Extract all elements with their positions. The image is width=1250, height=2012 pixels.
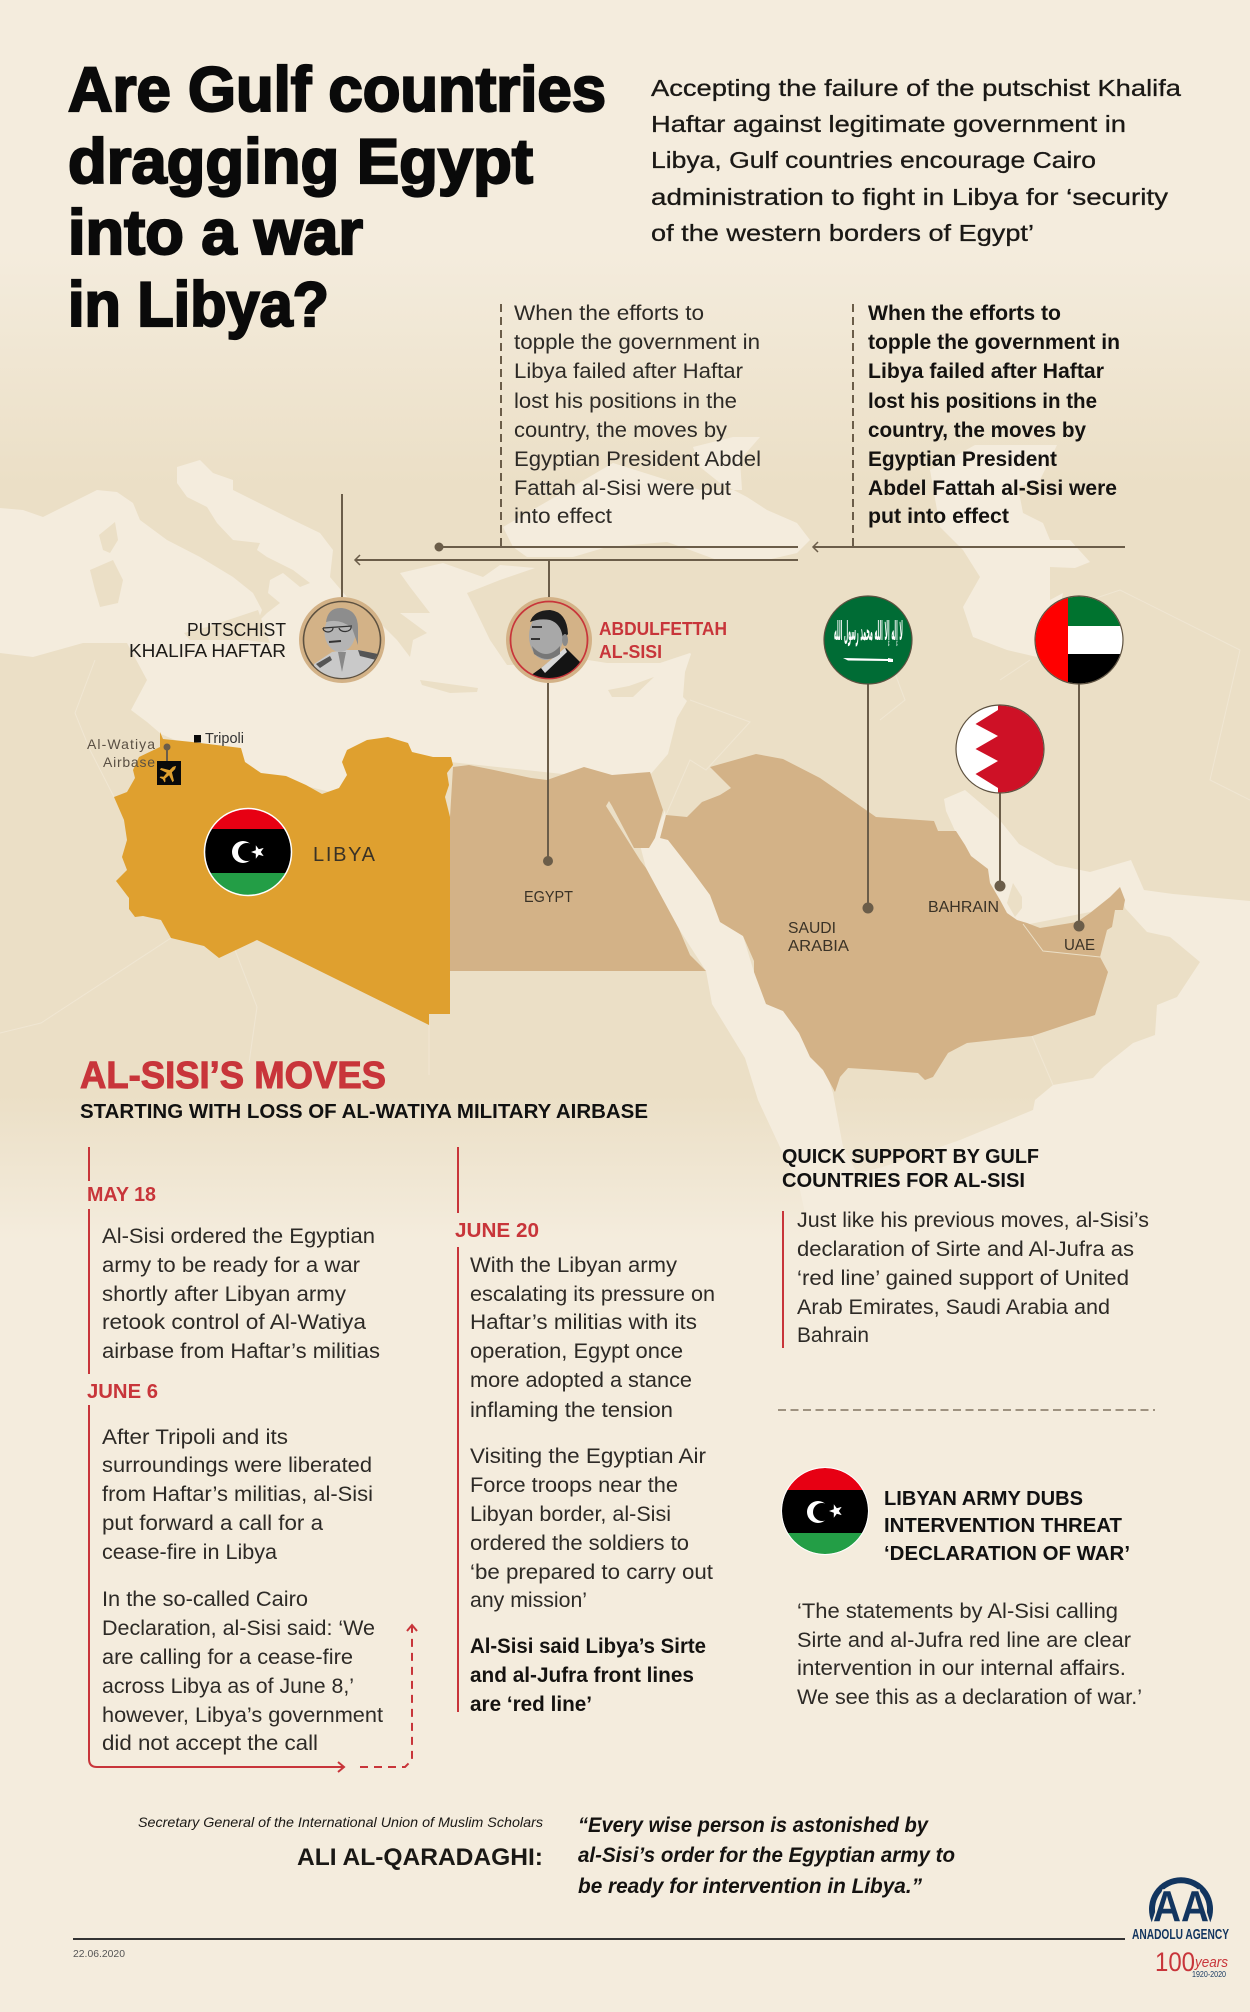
quote attribution: ALI AL-QARADAGHI:: [297, 1844, 543, 1871]
text block: efforts, left column: topple the government in: [514, 331, 760, 354]
text: June 20: [470, 1254, 715, 1612]
label: Abdulfettah al-Sisi: ABDULFETTAH: [599, 618, 727, 639]
text: Libyan army statement: We see this as a declaration of war.’: [797, 1686, 1142, 1709]
heading: Al-Sisi's moves: AL-SISI’S MOVES: [80, 1055, 386, 1097]
text: June 20: Visiting the Egyptian Air: [470, 1445, 706, 1468]
text: quick support: Just like his previous moves, al-Sisi’s: [797, 1209, 1149, 1232]
text: quick support: Arab Emirates, Saudi Arabia and: [797, 1296, 1110, 1319]
map: Saudi Arabia and UAE: [660, 754, 1125, 1092]
label: Al-Watiya Airbase: Al-Watiya: [87, 736, 155, 752]
text: June 20: more adopted a stance: [470, 1369, 692, 1392]
text: Libyan army statement: intervention in our internal affairs.: [797, 1657, 1126, 1680]
quote: be ready for intervention in Libya.”: [578, 1875, 922, 1898]
text: red line statement: [470, 1635, 706, 1716]
text: June 20: Haftar’s militias with its: [470, 1311, 697, 1334]
text block: efforts, bold right column: When the efforts to: [868, 302, 1061, 325]
text: red line statement: are ‘red line’: [470, 1693, 592, 1716]
text block: efforts, bold right column: put into effect: [868, 505, 1009, 528]
portrait: Abdulfettah al-Sisi: [506, 597, 592, 690]
quote: [578, 1814, 955, 1898]
text: June 20: With the Libyan army: [470, 1254, 678, 1277]
text: June 6: from Haftar’s militias, al-Sisi: [102, 1483, 373, 1506]
text: quick support: [783, 1209, 1149, 1348]
text: red line statement: Al-Sisi said Libya’s Sirte: [470, 1635, 706, 1658]
text block: efforts, bold right column: Libya failed after Haftar: [868, 360, 1104, 383]
text block: efforts, bold right column: Egyptian President: [868, 448, 1057, 471]
date: May 18: MAY 18: [87, 1184, 156, 1206]
text: Libyan army statement: [797, 1600, 1142, 1709]
text block: efforts, bold right column: topple the government in: [868, 331, 1120, 354]
label: Abdulfettah al-Sisi: AL-SISI: [599, 641, 662, 662]
text: Libyan army statement: Sirte and al-Jufra red line are clear: [797, 1629, 1131, 1652]
map: Libya: [114, 732, 453, 1025]
text: May 18: shortly after Libyan army: [102, 1283, 347, 1306]
text block: efforts, left column: Egyptian President Abdel: [514, 448, 761, 471]
flag: Libya on map: [204, 808, 292, 896]
background map: [0, 250, 1250, 1330]
logo: 100 years: 100: [1155, 1947, 1195, 1977]
title: in Libya?: [68, 270, 329, 340]
text: June 6: across Libya as of June 8,’: [102, 1675, 354, 1698]
text: June 20: operation, Egypt once: [470, 1340, 683, 1363]
text block: efforts, left column: into effect: [514, 505, 612, 528]
text: May 18: airbase from Haftar’s militias: [102, 1340, 380, 1363]
heading: quick support: COUNTRIES FOR AL-SISI: [782, 1169, 1025, 1192]
text: June 6: [102, 1426, 383, 1755]
logo: Anadolu Agency: AA: [1153, 1882, 1209, 1931]
subheading: STARTING WITH LOSS OF AL-WATIYA MILITARY AIRBASE: [80, 1100, 648, 1123]
intro text: [651, 75, 1181, 246]
connector lines: [342, 304, 1125, 600]
text: June 6: did not accept the call: [102, 1732, 318, 1755]
text: June 6: Declaration, al-Sisi said: ‘We: [102, 1617, 375, 1640]
text: quick support: Bahrain: [797, 1324, 869, 1347]
labels: Gulf countries: SAUDI: [788, 920, 836, 937]
text block: efforts, bold right column: [868, 302, 1120, 528]
heading: Libyan army: ‘DECLARATION OF WAR’: [884, 1542, 1130, 1565]
logo: 100 years: 1920-2020: [1192, 1970, 1226, 1979]
text block: efforts, left column: Libya failed after Haftar: [514, 360, 743, 383]
map: Egypt: [450, 765, 706, 971]
label: Al-Watiya Airbase: [87, 736, 155, 770]
text: May 18: army to be ready for a war: [102, 1254, 360, 1277]
label: Khalifa Haftar: KHALIFA HAFTAR: [129, 640, 286, 661]
intro text: of the western borders of Egypt’: [651, 220, 1034, 246]
text: June 20: any mission’: [470, 1589, 587, 1612]
text: quick support: ‘red line’ gained support of United: [797, 1267, 1129, 1290]
text: June 6: surroundings were liberated: [102, 1454, 372, 1477]
flag: Libya beside heading: [782, 1468, 868, 1555]
label: Tripoli: Tripoli: [205, 731, 244, 747]
label: Egypt: EGYPT: [524, 889, 573, 906]
text: June 6: After Tripoli and its: [102, 1426, 288, 1449]
text: June 20: Libyan border, al-Sisi: [470, 1503, 671, 1526]
heading: Libyan army: [884, 1487, 1130, 1565]
heading: quick support: QUICK SUPPORT BY GULF: [782, 1145, 1039, 1168]
text block: efforts, bold right column: country, the moves by: [868, 419, 1086, 442]
quote attribution: Secretary General of the International Union of Muslim Scholars: [138, 1815, 543, 1830]
text: June 20: ‘be prepared to carry out: [470, 1561, 713, 1584]
labels: Gulf countries: [788, 899, 1095, 955]
quote: “Every wise person is astonished by: [578, 1814, 929, 1837]
text: June 20: escalating its pressure on: [470, 1283, 715, 1306]
logo: Anadolu Agency: [1132, 1880, 1229, 1943]
text block: efforts, left column: Fattah al-Sisi were put: [514, 477, 731, 500]
portrait: Khalifa Haftar: [299, 597, 385, 690]
title: dragging Egypt: [68, 127, 533, 197]
text: June 20: inflaming the tension: [470, 1399, 673, 1422]
heading: Libyan army: LIBYAN ARMY DUBS: [884, 1487, 1083, 1510]
text block: efforts, left column: When the efforts to: [514, 302, 704, 325]
text block: efforts, left column: [514, 302, 761, 528]
text: June 6: put forward a call for a: [102, 1512, 323, 1535]
intro text: Haftar against legitimate government in: [651, 111, 1126, 137]
heading: Libyan army: INTERVENTION THREAT: [884, 1514, 1122, 1537]
logo: 100 years: [1155, 1947, 1228, 1979]
heading: quick support: [782, 1145, 1039, 1192]
label: Abdulfettah al-Sisi: [599, 618, 727, 662]
label: Libya: LIBYA: [313, 844, 376, 866]
text block: efforts, bold right column: Abdel Fattah al-Sisi were: [868, 477, 1117, 500]
label: Khalifa Haftar: [129, 619, 286, 661]
quote attribution: [138, 1815, 543, 1871]
text block: efforts, bold right column: lost his positions in the: [868, 390, 1097, 413]
date stamp: 22.06.2020: [73, 1948, 125, 1960]
text: quick support: declaration of Sirte and Al-Jufra as: [797, 1238, 1134, 1261]
title: Are Gulf countries: [68, 55, 606, 125]
text: June 6: however, Libya’s government: [102, 1704, 383, 1727]
intro text: Accepting the failure of the putschist Khalifa: [651, 75, 1181, 101]
flag: Bahrain: [955, 704, 1045, 892]
date: June 6: JUNE 6: [87, 1381, 158, 1403]
quote: al-Sisi’s order for the Egyptian army to: [578, 1844, 955, 1867]
text: June 20: ordered the soldiers to: [470, 1532, 689, 1555]
labels: Gulf countries: BAHRAIN: [928, 899, 999, 916]
text: Libyan army statement: ‘The statements by Al-Sisi calling: [797, 1600, 1118, 1623]
labels: Gulf countries: UAE: [1064, 937, 1095, 954]
text: لا إله إلا الله محمد رسول الله: [834, 617, 903, 647]
text block: efforts, left column: country, the moves by: [514, 419, 728, 442]
Egypt pin: [543, 683, 553, 866]
icon: airbase plane: [156, 744, 182, 786]
logo: 100 years: years: [1194, 1954, 1228, 1971]
text: May 18: [102, 1225, 380, 1363]
text block: efforts, left column: lost his positions in the: [514, 390, 737, 413]
flag: Saudi Arabia: [824, 596, 912, 914]
label: Al-Watiya Airbase: Airbase: [103, 754, 155, 770]
text: May 18: retook control of Al-Watiya: [102, 1311, 366, 1334]
text: red line statement: and al-Jufra front lines: [470, 1664, 694, 1687]
text: June 6: In the so-called Cairo: [102, 1588, 308, 1611]
labels: Gulf countries: ARABIA: [788, 938, 849, 955]
label: Khalifa Haftar: PUTSCHIST: [187, 619, 286, 640]
intro text: administration to fight in Libya for ‘security: [651, 184, 1169, 210]
timeline rail: middle column: [457, 1147, 459, 1712]
text: June 6: cease-fire in Libya: [102, 1541, 277, 1564]
timeline rail: left column: [89, 1147, 417, 1772]
title: [68, 55, 606, 340]
text: June 20: Force troops near the: [470, 1474, 678, 1497]
title: into a war: [68, 198, 363, 268]
flag: UAE: [1030, 596, 1128, 932]
date: June 20: JUNE 20: [455, 1220, 539, 1242]
text: May 18: Al-Sisi ordered the Egyptian: [102, 1225, 375, 1248]
text: June 6: are calling for a cease-fire: [102, 1646, 353, 1669]
intro text: Libya, Gulf countries encourage Cairo: [651, 147, 1096, 173]
